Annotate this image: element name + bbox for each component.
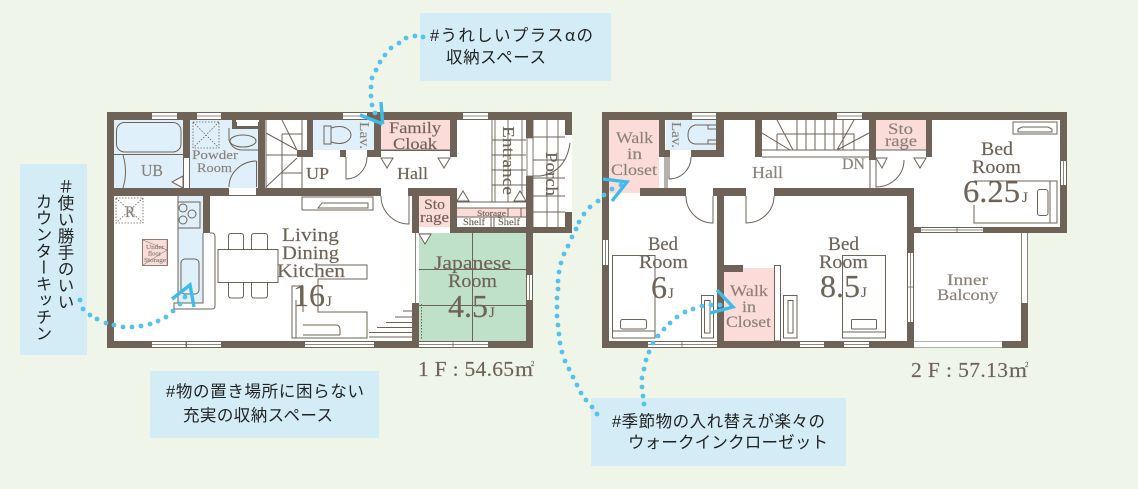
door gap in powder wall xyxy=(184,158,189,188)
ventilation triangles 1F xyxy=(172,158,526,244)
windows 1F xyxy=(152,113,532,347)
label: Balcony: Balcony xyxy=(937,287,998,304)
label: Kitchen: Kitchen xyxy=(277,262,345,282)
label: 6.25J: 6.25J xyxy=(963,173,1028,209)
room fill: storage xyxy=(876,120,926,150)
label: Porch: Porch xyxy=(542,152,561,197)
dotted arrow: to upper walk in closet xyxy=(555,179,627,416)
room fill: lavatory xyxy=(313,120,374,150)
under floor storage: Storage xyxy=(144,257,166,264)
room fill: under stair storage xyxy=(457,208,527,217)
room fill: kitchen xyxy=(178,196,203,303)
label: Japanese: Japanese xyxy=(434,254,511,274)
room fill: japanese room xyxy=(419,233,526,341)
callout: plus alpha storage: 収納スペース xyxy=(446,48,546,67)
bed 6 xyxy=(612,256,655,338)
dotted arrow: to kitchen xyxy=(78,285,194,329)
room labels 1F xyxy=(125,120,561,324)
callout: counter kitchen: ＃使い勝手のいい xyxy=(55,178,74,310)
callout: storage space: 充実の収納スペース xyxy=(183,406,333,425)
lav door xyxy=(346,157,367,179)
ventilation triangles 2F xyxy=(876,158,926,168)
storage shelf strip xyxy=(876,151,926,157)
callout: counter kitchen xyxy=(20,164,87,355)
toilet in lavatory xyxy=(688,125,716,144)
label: rage: rage xyxy=(420,210,449,226)
label: Storage: Storage xyxy=(477,209,507,218)
room fill: storage xyxy=(419,196,450,227)
door to living room xyxy=(381,196,409,224)
powder door xyxy=(229,161,256,187)
label: 6J: 6J xyxy=(651,269,674,305)
R dotted square xyxy=(116,198,143,223)
floor area 2F: m xyxy=(1009,358,1027,382)
fixtures: bath xyxy=(114,154,183,188)
dining table and chairs xyxy=(218,234,278,298)
callout: walk in closet: #季節物の入れ替えが楽々の xyxy=(612,412,825,431)
dotted tatami edge xyxy=(420,304,422,340)
stair lines 1F xyxy=(266,120,302,188)
under floor storage xyxy=(142,240,168,266)
closet shelf lines xyxy=(665,150,926,188)
label: Shelf right: Shelf xyxy=(498,217,520,227)
label: Cloak: Cloak xyxy=(393,136,437,153)
tatami lines xyxy=(419,233,526,341)
label: Sto: Sto xyxy=(888,121,913,138)
floor area 1F: m xyxy=(515,357,533,381)
callout: counter kitchen: カウンターキッチン xyxy=(33,193,51,342)
label: Bed: Bed xyxy=(648,235,679,255)
label: UP: UP xyxy=(306,164,329,183)
room labels 2F xyxy=(611,121,1028,331)
label: Entrance: Entrance xyxy=(499,126,518,195)
floor area 1F xyxy=(107,112,572,348)
room fill: family cloak xyxy=(381,120,450,150)
bedroom doors xyxy=(686,196,774,223)
callout: plus alpha storage: #うれしいプラスαの xyxy=(430,22,593,46)
stair steps in living room xyxy=(369,311,412,337)
label: R: R xyxy=(125,204,135,221)
label: rage: rage xyxy=(885,133,917,150)
closet rods xyxy=(702,296,797,338)
label: Room: Room xyxy=(819,253,869,273)
label: Powder: Powder xyxy=(192,147,239,162)
floor area 2F: 2 xyxy=(1025,361,1029,369)
label: Bed: Bed xyxy=(828,235,860,255)
label: Lav: Lav. xyxy=(356,122,371,149)
entrance and porch tiles xyxy=(492,120,565,227)
sink xyxy=(181,259,199,294)
toilet in powder room xyxy=(229,128,258,150)
label: Walk: Walk xyxy=(616,130,653,147)
floor area 2F: 2 F : 57.13 xyxy=(911,358,1008,382)
kitchen counter xyxy=(174,196,215,309)
label: Hall: Hall xyxy=(752,163,783,182)
label: Hall: Hall xyxy=(397,164,428,183)
callout: storage space: #物の置き場所に困らない xyxy=(166,382,364,401)
sofa and low board xyxy=(292,265,367,338)
cloak shelf strip xyxy=(381,151,450,157)
label: Sto: Sto xyxy=(424,197,445,213)
label: Dining: Dining xyxy=(282,244,339,264)
tv board in bedroom xyxy=(1013,122,1057,134)
closet shelves xyxy=(381,150,527,227)
storage door xyxy=(876,160,904,187)
stove xyxy=(178,202,200,228)
lav door xyxy=(669,157,691,179)
dotted arrow: to lower walk in closet xyxy=(640,290,733,406)
dotted arrow: to family cloak xyxy=(360,34,425,124)
callout: storage space xyxy=(150,371,379,438)
room fill: walk in closet upper xyxy=(609,120,659,193)
windows 2F xyxy=(603,113,1066,348)
label: Inner: Inner xyxy=(947,272,989,289)
panel: second floor plan xyxy=(602,112,1067,382)
under floor storage: floor xyxy=(148,250,162,258)
label: Shelf left: Shelf xyxy=(463,217,485,227)
label: in: in xyxy=(627,146,642,163)
label: 4.5J: 4.5J xyxy=(448,288,495,324)
label: 16J: 16J xyxy=(293,277,332,313)
bed 8.5 xyxy=(842,256,886,338)
label: Closet: Closet xyxy=(726,314,772,331)
walls 1F xyxy=(107,112,572,348)
under floor storage: Under xyxy=(146,244,165,251)
label: 8.5J: 8.5J xyxy=(820,268,867,304)
walls 2F xyxy=(602,112,1067,348)
callout: walk in closet: ウォークインクローゼット xyxy=(628,433,828,452)
label: Living: Living xyxy=(282,226,339,246)
label: in: in xyxy=(742,299,756,316)
label: DN: DN xyxy=(842,156,865,173)
floor area 1F: 2 xyxy=(531,360,535,368)
entrance door xyxy=(533,143,570,176)
toilet in lavatory xyxy=(324,126,351,144)
room fill: walk in closet lower xyxy=(724,268,774,341)
room fill: lavatory xyxy=(666,120,716,150)
room fill: unit bath xyxy=(114,120,183,188)
bed 6.25 xyxy=(974,181,1057,223)
label: UB: UB xyxy=(141,161,163,180)
bathtub xyxy=(116,122,181,152)
callout: plus alpha storage xyxy=(420,13,611,81)
thin closet partition xyxy=(774,266,780,341)
room fill: powder room xyxy=(190,120,258,188)
label: Room: Room xyxy=(639,253,689,273)
label: Bed: Bed xyxy=(981,140,1014,160)
label: Room: Room xyxy=(448,272,498,292)
panel: first floor plan xyxy=(107,112,572,381)
tv board xyxy=(302,197,373,210)
label: Closet: Closet xyxy=(611,162,658,179)
label: Family: Family xyxy=(389,120,441,137)
floor area 1F: 1 F : 54.65 xyxy=(418,357,514,381)
powder room dotted square xyxy=(193,122,219,148)
label: Walk: Walk xyxy=(730,283,768,300)
floor area 2F xyxy=(602,112,1067,348)
label: Lav: Lav. xyxy=(668,122,683,148)
label: Room: Room xyxy=(972,158,1022,178)
label: Room: Room xyxy=(197,160,232,175)
stairs 2F xyxy=(762,120,869,157)
callout: walk in closet xyxy=(591,398,846,466)
